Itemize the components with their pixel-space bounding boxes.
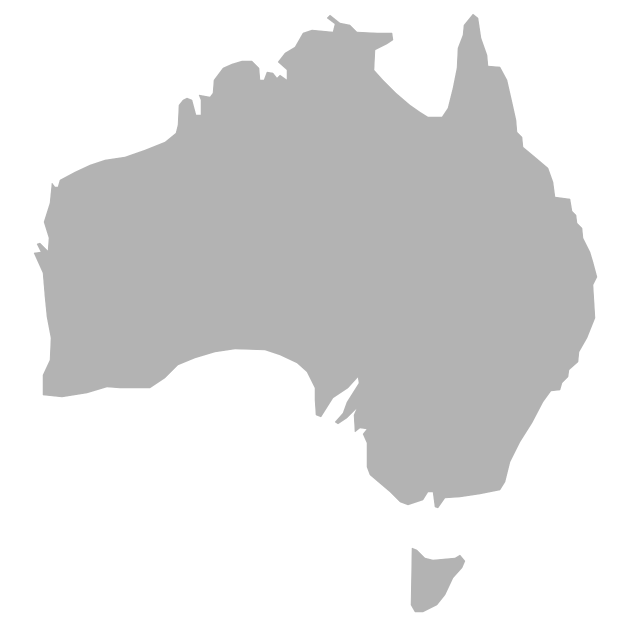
mainland Australia	[34, 14, 597, 508]
Tasmania	[411, 548, 465, 612]
